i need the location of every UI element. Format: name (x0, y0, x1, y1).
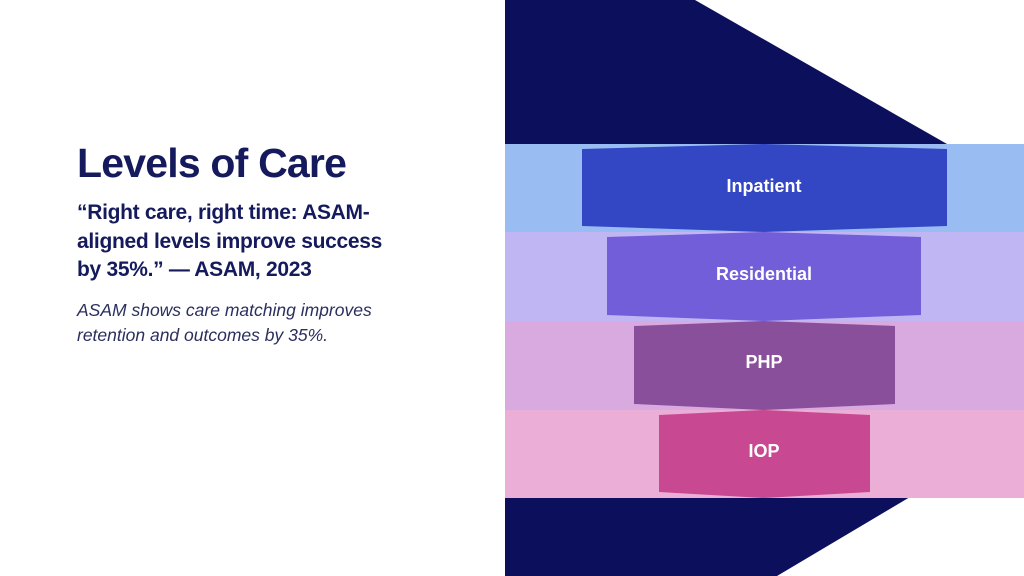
band: inpatient: Inpatient (726, 176, 802, 196)
band: residential: Residential (716, 264, 812, 284)
quote: “Right care, right time: ASAM-aligned levels improve success by 35%.” — ASAM, 2023 (77, 201, 382, 281)
title: Levels of Care (77, 140, 346, 186)
band: PHP: PHP (745, 352, 783, 372)
band: IOP (505, 410, 1024, 498)
band: IOP: IOP (748, 441, 780, 461)
dark funnel background (505, 0, 947, 576)
band: PHP (505, 321, 1024, 410)
description text: ASAM shows care matching improves retention and outcomes by 35%. (77, 300, 372, 345)
band: residential (505, 232, 1024, 321)
band: inpatient (505, 144, 1024, 232)
